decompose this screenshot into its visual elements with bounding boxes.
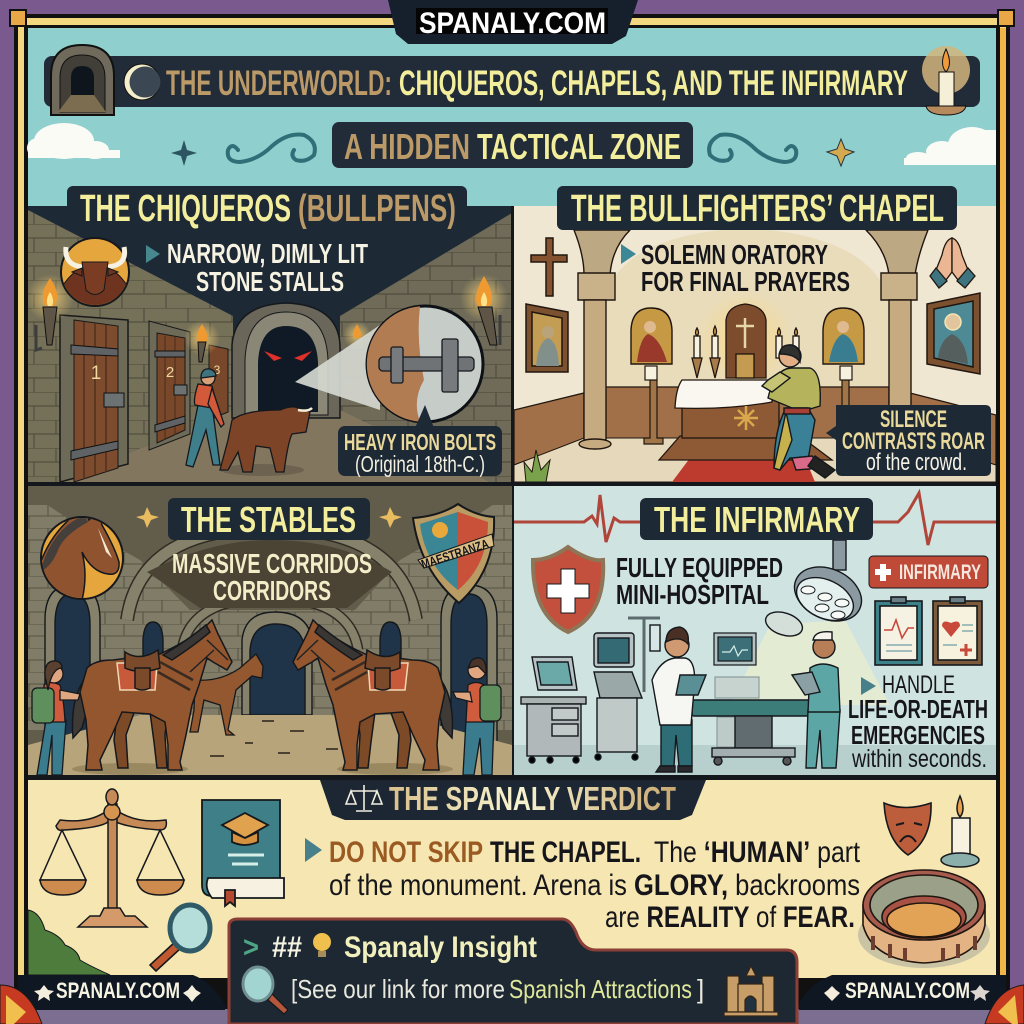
icon: bull head xyxy=(60,238,130,310)
caption: heavy iron bolts: (Original 18th-C.) xyxy=(355,451,485,477)
text: massive corridos: MASSIVE CORRIDOS xyxy=(172,548,372,579)
stone archway xyxy=(232,303,340,418)
stall door 2 xyxy=(149,321,190,450)
heading: the chiqueros: THE CHIQUEROS xyxy=(80,188,291,230)
plant xyxy=(524,450,550,482)
text: solemn oratory: SOLEMN ORATORY xyxy=(641,239,828,270)
corner flame badges xyxy=(0,985,1024,1024)
panel: the bullfighters chapel xyxy=(514,206,996,482)
icon: scales xyxy=(40,789,184,927)
heading: spanaly insight xyxy=(243,931,537,964)
text shadow vault xyxy=(147,540,392,608)
horse left xyxy=(72,620,232,775)
footer tab left: SPANALY.COM xyxy=(56,978,180,1003)
monitor cart xyxy=(521,657,586,763)
visitor right xyxy=(453,658,501,775)
heading: spanaly insight: > xyxy=(243,931,259,964)
footer tab left xyxy=(18,975,225,1010)
callout: silence contrasts: SILENCE xyxy=(880,406,947,433)
panel: the stables xyxy=(28,486,512,775)
icon: candle xyxy=(922,46,970,115)
visitor left xyxy=(32,661,80,775)
surgical lamps xyxy=(763,540,870,640)
bull in corridor xyxy=(220,407,312,476)
text: verdict body xyxy=(305,836,861,934)
text: fully equipped xyxy=(616,552,783,610)
apse xyxy=(606,230,888,386)
icon: bullring xyxy=(858,870,990,968)
heading: the stables: THE STABLES xyxy=(181,499,356,540)
stall door 3 xyxy=(209,345,228,420)
arches and columns xyxy=(574,230,928,449)
label: infirmary sign: INFIRMARY xyxy=(899,561,981,584)
icon: red cross shield xyxy=(533,547,603,632)
icon: book xyxy=(202,800,284,906)
floor specks xyxy=(210,720,338,757)
text: massive corridos xyxy=(172,548,372,606)
ornaments: stars and swirls xyxy=(171,134,854,166)
text: verdict body: are REALITY of FEAR. xyxy=(605,901,855,934)
icon: maestranza shield: MAESTRANZA xyxy=(419,536,491,572)
text: handle emergencies: within seconds. xyxy=(851,745,987,773)
right stone wall xyxy=(340,213,512,482)
label: infirmary sign xyxy=(869,556,988,588)
stall door 3: 3 xyxy=(214,363,221,377)
text: solemn oratory: FOR FINAL PRAYERS xyxy=(641,266,850,297)
red carpet xyxy=(672,460,815,482)
glowing red eyes xyxy=(264,351,312,361)
text: attractions link xyxy=(291,974,704,1004)
callout: silence contrasts xyxy=(826,405,991,476)
operating table xyxy=(692,700,810,765)
icons: arched saints xyxy=(631,308,864,364)
icon: tunnel xyxy=(51,45,114,115)
icon: verdict candle xyxy=(941,796,979,867)
text: narrow stalls: STONE STALLS xyxy=(196,266,344,297)
text: attractions link: Spanish Attractions xyxy=(509,974,692,1004)
icon: tragedy mask xyxy=(884,803,931,855)
floor xyxy=(28,715,512,775)
left stone wall xyxy=(28,210,233,482)
icon: horse head xyxy=(38,507,123,600)
icon: maestranza shield xyxy=(413,504,494,603)
kneeling matador xyxy=(762,345,835,478)
icon: small magnifier xyxy=(243,967,288,1014)
caption: heavy iron bolts xyxy=(338,426,502,477)
title bar xyxy=(44,56,980,107)
footer tab right: SPANALY.COM xyxy=(845,978,970,1003)
text: narrow stalls: NARROW, DIMLY LIT xyxy=(167,238,368,269)
subtitle: a hidden tactical zone xyxy=(332,122,693,168)
icon: praying hands xyxy=(930,238,975,288)
heading: spanaly insight: Spanaly Insight xyxy=(344,931,537,964)
text: verdict body: The ‘HUMAN’ part xyxy=(654,836,861,869)
framed painting left xyxy=(526,304,568,372)
footer tab right xyxy=(799,975,1006,1010)
stall door 1: 1 xyxy=(91,363,101,384)
heading: the infirmary: THE INFIRMARY xyxy=(654,499,860,540)
stall door 1 xyxy=(60,315,128,482)
stone walls xyxy=(28,505,512,730)
background horse xyxy=(190,654,263,735)
subtitle: a hidden tactical zone: A HIDDEN xyxy=(344,126,470,167)
candle stands xyxy=(644,366,852,444)
text: handle emergencies xyxy=(848,671,988,773)
caption: heavy iron bolts: HEAVY IRON BOLTS xyxy=(344,429,496,455)
heading: the chiqueros: (BULLPENS) xyxy=(298,188,456,230)
text: fully equipped: MINI-HOSPITAL xyxy=(616,579,769,610)
wall cross xyxy=(531,238,567,296)
icon: magnifying glass xyxy=(150,905,210,971)
panel: the spanaly verdict xyxy=(28,780,996,978)
callout: silence contrasts: of the crowd. xyxy=(866,449,967,476)
floor xyxy=(514,438,996,482)
text: attractions link: [See our link for more xyxy=(291,974,505,1004)
text: attractions link: ] xyxy=(697,974,704,1004)
horse right xyxy=(293,620,453,775)
icon: castle xyxy=(724,966,778,1016)
light cone xyxy=(730,620,890,705)
heading badge: verdict xyxy=(320,780,706,820)
panel: the infirmary xyxy=(514,486,996,775)
panel: the chiqueros xyxy=(26,206,512,482)
icon: clipboards xyxy=(875,597,982,665)
top brand badge xyxy=(388,0,638,44)
torches xyxy=(26,274,508,362)
icon: moon xyxy=(124,64,160,100)
top brand badge: SPANALY.COM xyxy=(419,7,606,40)
framed painting right xyxy=(927,293,980,374)
stall door 2: 2 xyxy=(166,364,174,381)
text: solemn oratory xyxy=(621,244,850,292)
text: verdict body: of the monument. Arena is GLORY, backrooms xyxy=(329,869,860,902)
worker xyxy=(186,369,224,467)
sparkles xyxy=(136,507,402,528)
doors and arches xyxy=(44,585,498,742)
clouds xyxy=(27,123,996,165)
floor xyxy=(514,745,996,775)
doctor xyxy=(652,627,706,772)
ecg line xyxy=(514,493,996,545)
text: narrow stalls xyxy=(146,244,368,292)
subtitle: a hidden tactical zone: TACTICAL ZONE xyxy=(477,126,681,167)
bush xyxy=(28,910,110,975)
panel divider lines xyxy=(28,206,996,780)
ventilator machine xyxy=(594,618,660,760)
text: verdict body: DO NOT SKIP xyxy=(329,836,483,869)
heading: spanaly insight: ## xyxy=(272,931,302,964)
magnifier callout: iron bolts xyxy=(295,306,483,428)
wainscoting xyxy=(514,387,996,465)
panel: spanaly insight xyxy=(229,919,797,1024)
text: fully equipped: FULLY EQUIPPED xyxy=(616,552,783,583)
vaulted ceiling xyxy=(48,505,492,610)
large arches xyxy=(127,528,416,650)
altar with crucifix and candles xyxy=(659,290,832,460)
nurse xyxy=(792,632,840,768)
title bar: THE UNDERWORLD: xyxy=(166,64,392,103)
back monitor xyxy=(714,633,769,747)
floor xyxy=(58,410,490,482)
text: massive corridos: CORRIDORS xyxy=(213,575,331,606)
heading badge: verdict: THE SPANALY VERDICT xyxy=(389,780,676,817)
text: handle emergencies: HANDLE xyxy=(882,671,955,699)
text: verdict body: THE CHAPEL. xyxy=(490,836,641,869)
